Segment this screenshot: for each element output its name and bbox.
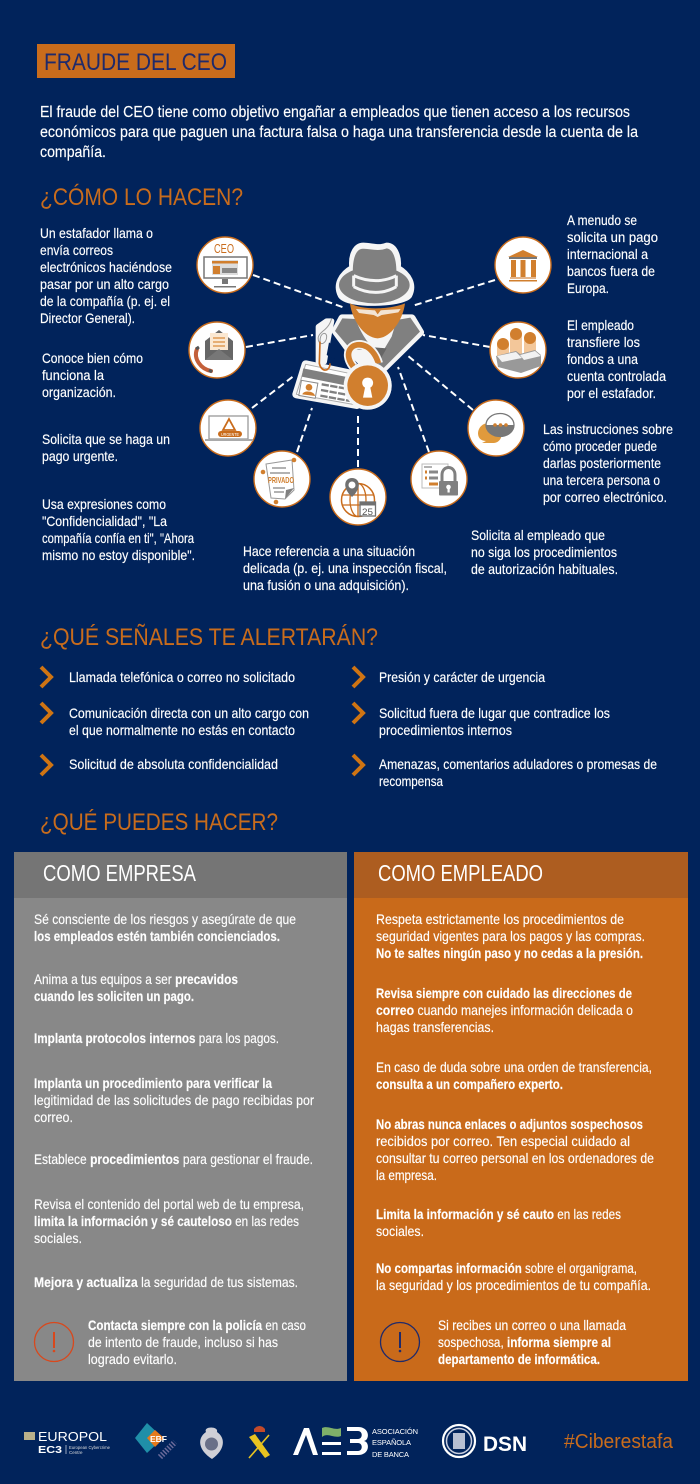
text: pago internacional [567, 212, 658, 296]
list: señales derecha: recompensa [379, 773, 443, 789]
advice: enlaces [376, 1116, 654, 1183]
text: pago urgente: Solicita que se haga un [42, 431, 170, 447]
panel: como empresa [14, 852, 347, 1381]
advice: direcciones de correo: correo cuando manejes información delicada o [376, 1002, 633, 1018]
logo: Europol EC3 [24, 1430, 110, 1456]
logo: Asociación Española de Banca [293, 1427, 418, 1459]
text: transferencia de fondos [567, 317, 666, 401]
text: estafador llama: envía correos [40, 242, 113, 258]
logo: Europol EC3: Centre [69, 1450, 83, 1455]
sunglasses [356, 309, 401, 317]
heading: señales: ¿QUÉ SEÑALES TE ALERTARÁN? [40, 624, 378, 651]
text: estafador llama: electrónicos haciéndose [40, 259, 172, 275]
panel header: empresa [14, 852, 347, 898]
logo: Europol EC3: EC3 [38, 1445, 63, 1456]
text: instrucciones: cómo proceder puede [543, 438, 657, 454]
text: procedimientos de autorización: no siga los procedimientos [471, 544, 617, 560]
logo: EBF: EBF [150, 1434, 167, 1444]
advice: concienciar [34, 911, 296, 944]
logo: Europol EC3: EUROPOL [38, 1430, 107, 1444]
coat [327, 318, 420, 372]
advice: direcciones de correo [376, 985, 633, 1035]
advice: enlaces: recibidos por correo. Ten especial cuidado al [376, 1133, 630, 1149]
icon: private document: PRIVADO [268, 475, 294, 485]
padlock [344, 345, 392, 410]
icon: bank [495, 237, 551, 293]
intro text: El fraude del CEO tiene como objetivo engañar a empleados que tienen acceso a los recursos [40, 104, 630, 121]
list: señales izquierda: Llamada telefónica o correo no solicitado [69, 669, 295, 685]
advice: no compartas: No compartas información sobre el organigrama, [376, 1260, 637, 1276]
list: señales izquierda: Solicitud de absoluta confidencialidad [69, 756, 278, 772]
text: procedimientos de autorización [471, 527, 618, 577]
text: pago internacional: A menudo se [567, 212, 637, 228]
logo: Asociación Española de Banca: DE BANCA [372, 1450, 409, 1459]
text: pago urgente [42, 431, 170, 464]
callout: policía [34, 1317, 306, 1367]
hashtag: #Ciberestafa [564, 1431, 674, 1453]
logo: DSN [443, 1425, 527, 1457]
advice: respeta procedimientos: seguridad vigentes para los pagos y las compras. [376, 928, 645, 944]
callout: informática: sospechosa, informa siempre al [438, 1334, 611, 1350]
icon: money stacks [490, 322, 546, 378]
advice: enlaces: No abras nunca enlaces o adjuntos sospechosos [376, 1116, 643, 1132]
intro text: económicos para que paguen una factura falsa o haga una transferencia desde la cuenta de la [40, 124, 638, 141]
icon: CEO monitor: CEO [214, 242, 234, 256]
advice: verificar: Implanta un procedimiento para verificar la [34, 1075, 272, 1091]
advice: verificar [34, 1075, 314, 1125]
advice: protocolos: Implanta protocolos internos para los pagos. [34, 1030, 279, 1046]
text: instrucciones: darlas posteriormente [543, 455, 661, 471]
icon: chat bubbles [468, 400, 524, 456]
advice: enlaces: consultar tu correo personal en los ordenadores de [376, 1150, 654, 1166]
heading: qué puedes hacer: ¿QUÉ PUEDES HACER? [40, 809, 278, 836]
advice: consulta [376, 1059, 652, 1092]
text: pago urgente: pago urgente. [42, 448, 118, 464]
panel header: empleado: COMO EMPLEADO [378, 860, 543, 886]
callout: policía: logrado evitarlo. [88, 1351, 177, 1367]
text: conoce la organización: Conoce bien cómo [42, 350, 143, 366]
icon: padlock and form [411, 451, 467, 507]
icon: laptop urgent: URGENTE [221, 432, 239, 437]
text: pago internacional: internacional a [567, 246, 648, 262]
advice: verificar: legitimidad de las solicitudes de pago recibidas por [34, 1092, 314, 1108]
advice: respeta procedimientos: No te saltes ningún paso y no cedas a la presión. [376, 945, 643, 961]
text: estafador llama: pasar por un alto cargo [40, 276, 169, 292]
icon: laptop urgent [200, 400, 256, 456]
advice: precavidos: cuando les soliciten un pago. [34, 988, 194, 1004]
advice: respeta procedimientos [376, 911, 645, 961]
advice: direcciones de correo: hagas transferencias. [376, 1019, 494, 1035]
text: transferencia de fondos: transfiere los [567, 334, 640, 350]
callout: policía: Contacta siempre con la policía en caso [88, 1317, 306, 1333]
text: estafador llama: Un estafador llama o [40, 225, 153, 241]
advice: portal web: sociales. [34, 1230, 82, 1246]
list: señales derecha: procedimientos internos [379, 722, 512, 738]
hat [339, 248, 410, 303]
list: señales derecha: Amenazas, comentarios aduladores o promesas de [379, 756, 657, 772]
text: transferencia de fondos: por el estafador. [567, 385, 656, 401]
icon: CEO monitor [197, 237, 253, 293]
text: procedimientos de autorización: de autorización habituales. [471, 561, 618, 577]
intro text: compañía. [40, 144, 106, 161]
advice: no compartas [376, 1260, 651, 1293]
callout: informática [380, 1317, 626, 1367]
list: señales izquierda: Comunicación directa con un alto cargo con [69, 705, 309, 721]
fish hook [319, 342, 330, 370]
logo: Asociación Española de Banca: ESPAÑOLA [372, 1438, 411, 1447]
list: señales derecha: Presión y carácter de urgencia [379, 669, 545, 685]
icon: globe and calendar: 25 [362, 507, 373, 517]
advice: consulta: consulta a un compañero experto. [376, 1076, 563, 1092]
advice: respeta procedimientos: Respeta estrictamente los procedimientos de [376, 911, 624, 927]
text: estafador llama [40, 225, 172, 326]
text: transferencia de fondos: cuenta controlada [567, 368, 666, 384]
advice: direcciones de correo: Revisa siempre con cuidado las direcciones de [376, 985, 632, 1001]
text: situación delicada: delicada (p. ej. una inspección fiscal, [243, 560, 447, 576]
text: instrucciones: Las instrucciones sobre [543, 421, 673, 437]
text: instrucciones [543, 421, 673, 505]
text: expresiones [42, 496, 195, 563]
icon: envelope and phone [189, 322, 245, 378]
icon: globe and calendar [330, 469, 386, 525]
advice: verificar: correo. [34, 1109, 73, 1125]
text: situación delicada: una fusión o una adquisición). [243, 577, 409, 593]
id card [296, 364, 357, 405]
advice: procedimientos: Establece procedimientos para gestionar el fraude. [34, 1151, 313, 1167]
text: situación delicada: Hace referencia a una situación [243, 543, 415, 559]
text: transferencia de fondos: El empleado [567, 317, 634, 333]
text: expresiones: mismo no estoy disponible". [42, 547, 195, 563]
text: conoce la organización [42, 350, 143, 400]
title: FRAUDE DEL CEO [44, 49, 227, 76]
heading: cómo lo hacen: ¿CÓMO LO HACEN? [40, 184, 243, 211]
text: estafador llama: Director General). [40, 310, 135, 326]
list: señales derecha [353, 667, 657, 789]
list: señales izquierda [41, 667, 309, 775]
text: transferencia de fondos: fondos a una [567, 351, 638, 367]
callout: policía: de intento de fraude, incluso si has [88, 1334, 278, 1350]
advice: consulta: En caso de duda sobre una orden de transferencia, [376, 1059, 652, 1075]
text: expresiones: Usa expresiones como [42, 496, 166, 512]
advice: limita: Limita la información y sé cauto en las redes [376, 1206, 621, 1222]
logo: EBF [135, 1423, 175, 1457]
logo: Guardia Civil [249, 1426, 270, 1458]
text: conoce la organización: funciona la [42, 367, 104, 383]
callout: informática: departamento de informática. [438, 1351, 600, 1367]
text: conoce la organización: organización. [42, 384, 116, 400]
illustration: central hacker figure [296, 247, 420, 410]
text: procedimientos de autorización: Solicita al empleado que [471, 527, 605, 543]
advice: precavidos [34, 971, 238, 1004]
text: estafador llama: de la compañía (p. ej. el [40, 293, 170, 309]
text: situación delicada [243, 543, 447, 593]
panel header: empleado [354, 852, 688, 898]
list: señales izquierda: el que normalmente no estás en contacto [69, 722, 295, 738]
text: instrucciones: por correo electrónico. [543, 489, 667, 505]
logo: DSN: DSN [483, 1433, 527, 1456]
text: expresiones: compañía confía en ti", "Ahora [42, 530, 194, 546]
advice: limita [376, 1206, 621, 1239]
logo: Asociación Española de Banca: ASOCIACIÓN [372, 1427, 418, 1436]
advice: limita: sociales. [376, 1223, 424, 1239]
advice: precavidos: Anima a tus equipos a ser precavidos [34, 971, 238, 987]
logo: Policía Nacional [200, 1428, 223, 1459]
intro text [40, 104, 638, 161]
advice: concienciar: los empleados estén también concienciados. [34, 928, 280, 944]
face [350, 303, 405, 338]
icon: private document [254, 451, 310, 507]
fishing line [318, 318, 332, 344]
text: instrucciones: una tercera persona o [543, 472, 660, 488]
advice: portal web [34, 1196, 304, 1246]
white silhouette [296, 247, 420, 406]
advice: portal web: Revisa el contenido del portal web de tu empresa, [34, 1196, 304, 1212]
advice: portal web: limita la información y sé cauteloso en las redes [34, 1213, 299, 1229]
diagram: dashed connectors [246, 275, 495, 467]
advice: no compartas: la seguridad y los procedimientos de tu compañía. [376, 1277, 651, 1293]
advice: concienciar: Sé consciente de los riesgos y asegúrate de que [34, 911, 296, 927]
panel: como empleado [354, 852, 688, 1381]
text: pago internacional: bancos fuera de [567, 263, 655, 279]
text: expresiones: "Confidencialidad", "La [42, 513, 167, 529]
advice: seguridad: Mejora y actualiza la seguridad de tus sistemas. [34, 1274, 298, 1290]
advice: enlaces: la empresa. [376, 1167, 437, 1183]
text: pago internacional: solicita un pago [567, 229, 658, 245]
list: señales derecha: Solicitud fuera de lugar que contradice los [379, 705, 610, 721]
logo: Europol EC3: European Cybercrime [69, 1445, 110, 1450]
panel header: empresa: COMO EMPRESA [43, 860, 197, 886]
callout: informática: Si recibes un correo o una llamada [438, 1317, 626, 1333]
text: pago internacional: Europa. [567, 280, 609, 296]
